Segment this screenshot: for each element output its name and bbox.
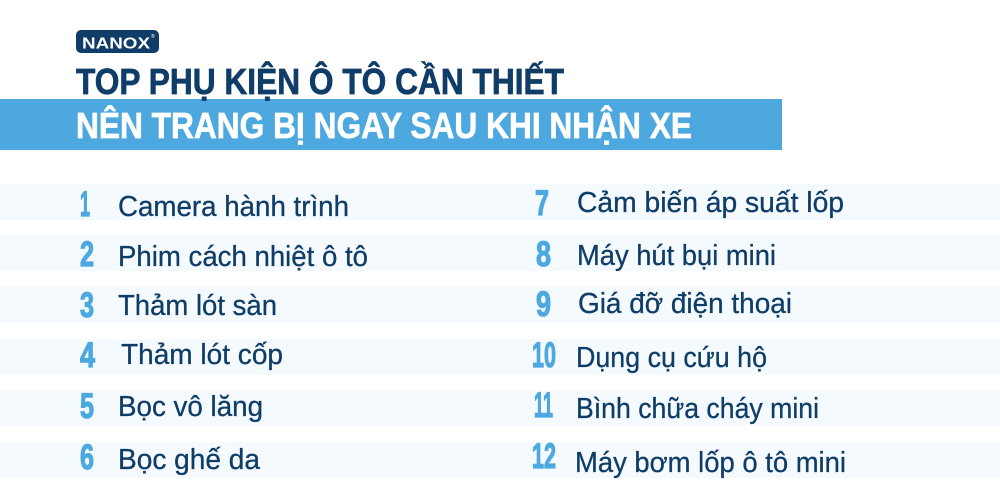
list row 5 [0, 386, 1000, 426]
list row 6: Máy bơm lốp ô tô mini [575, 447, 846, 479]
list row 6: 12 [532, 437, 556, 476]
list row 1 [0, 184, 1000, 224]
list row 4: 4 [80, 336, 95, 375]
list row 5: 5 [80, 387, 94, 426]
list row 2 [0, 235, 1000, 274]
list row 2: 8 [536, 235, 551, 274]
logo: NanoX: ® [151, 33, 155, 40]
list row 1: Cảm biến áp suất lốp [577, 187, 844, 219]
list row 3: Thảm lót sàn [118, 290, 277, 322]
list row 3: Giá đỡ điện thoại [578, 288, 792, 320]
list row 2: 2 [80, 235, 94, 274]
title line 2: NÊN TRANG BỊ NGAY SAU KHI NHẬN XE [76, 104, 692, 146]
list row 2: Máy hút bụi mini [577, 240, 776, 272]
list row 1: 1 [80, 185, 90, 224]
list row 3: 3 [80, 286, 94, 325]
list row 4: Dụng cụ cứu hộ [576, 342, 767, 374]
list row 5: Bình chữa cháy mini [576, 393, 819, 425]
list row 1: 7 [535, 184, 549, 223]
list row 3: 9 [536, 285, 551, 324]
logo: NanoX: NANOX [82, 36, 150, 52]
logo: NanoX [76, 30, 159, 53]
list row 5: Bọc vô lăng [118, 391, 263, 423]
list row 6 [0, 437, 1000, 479]
list row 4: Thảm lót cốp [121, 339, 283, 371]
list row 6: Bọc ghế da [118, 444, 261, 476]
list row 4 [0, 336, 1000, 375]
list row 2: Phim cách nhiệt ô tô [118, 241, 368, 273]
title band [0, 99, 782, 150]
list row 4: 10 [532, 336, 556, 375]
list row 6: 6 [80, 438, 94, 477]
list row 5: 11 [534, 386, 553, 425]
title line 1: TOP PHỤ KIỆN Ô TÔ CẦN THIẾT [76, 60, 564, 102]
list row 3 [0, 285, 1000, 325]
list row 1: Camera hành trình [118, 191, 349, 223]
